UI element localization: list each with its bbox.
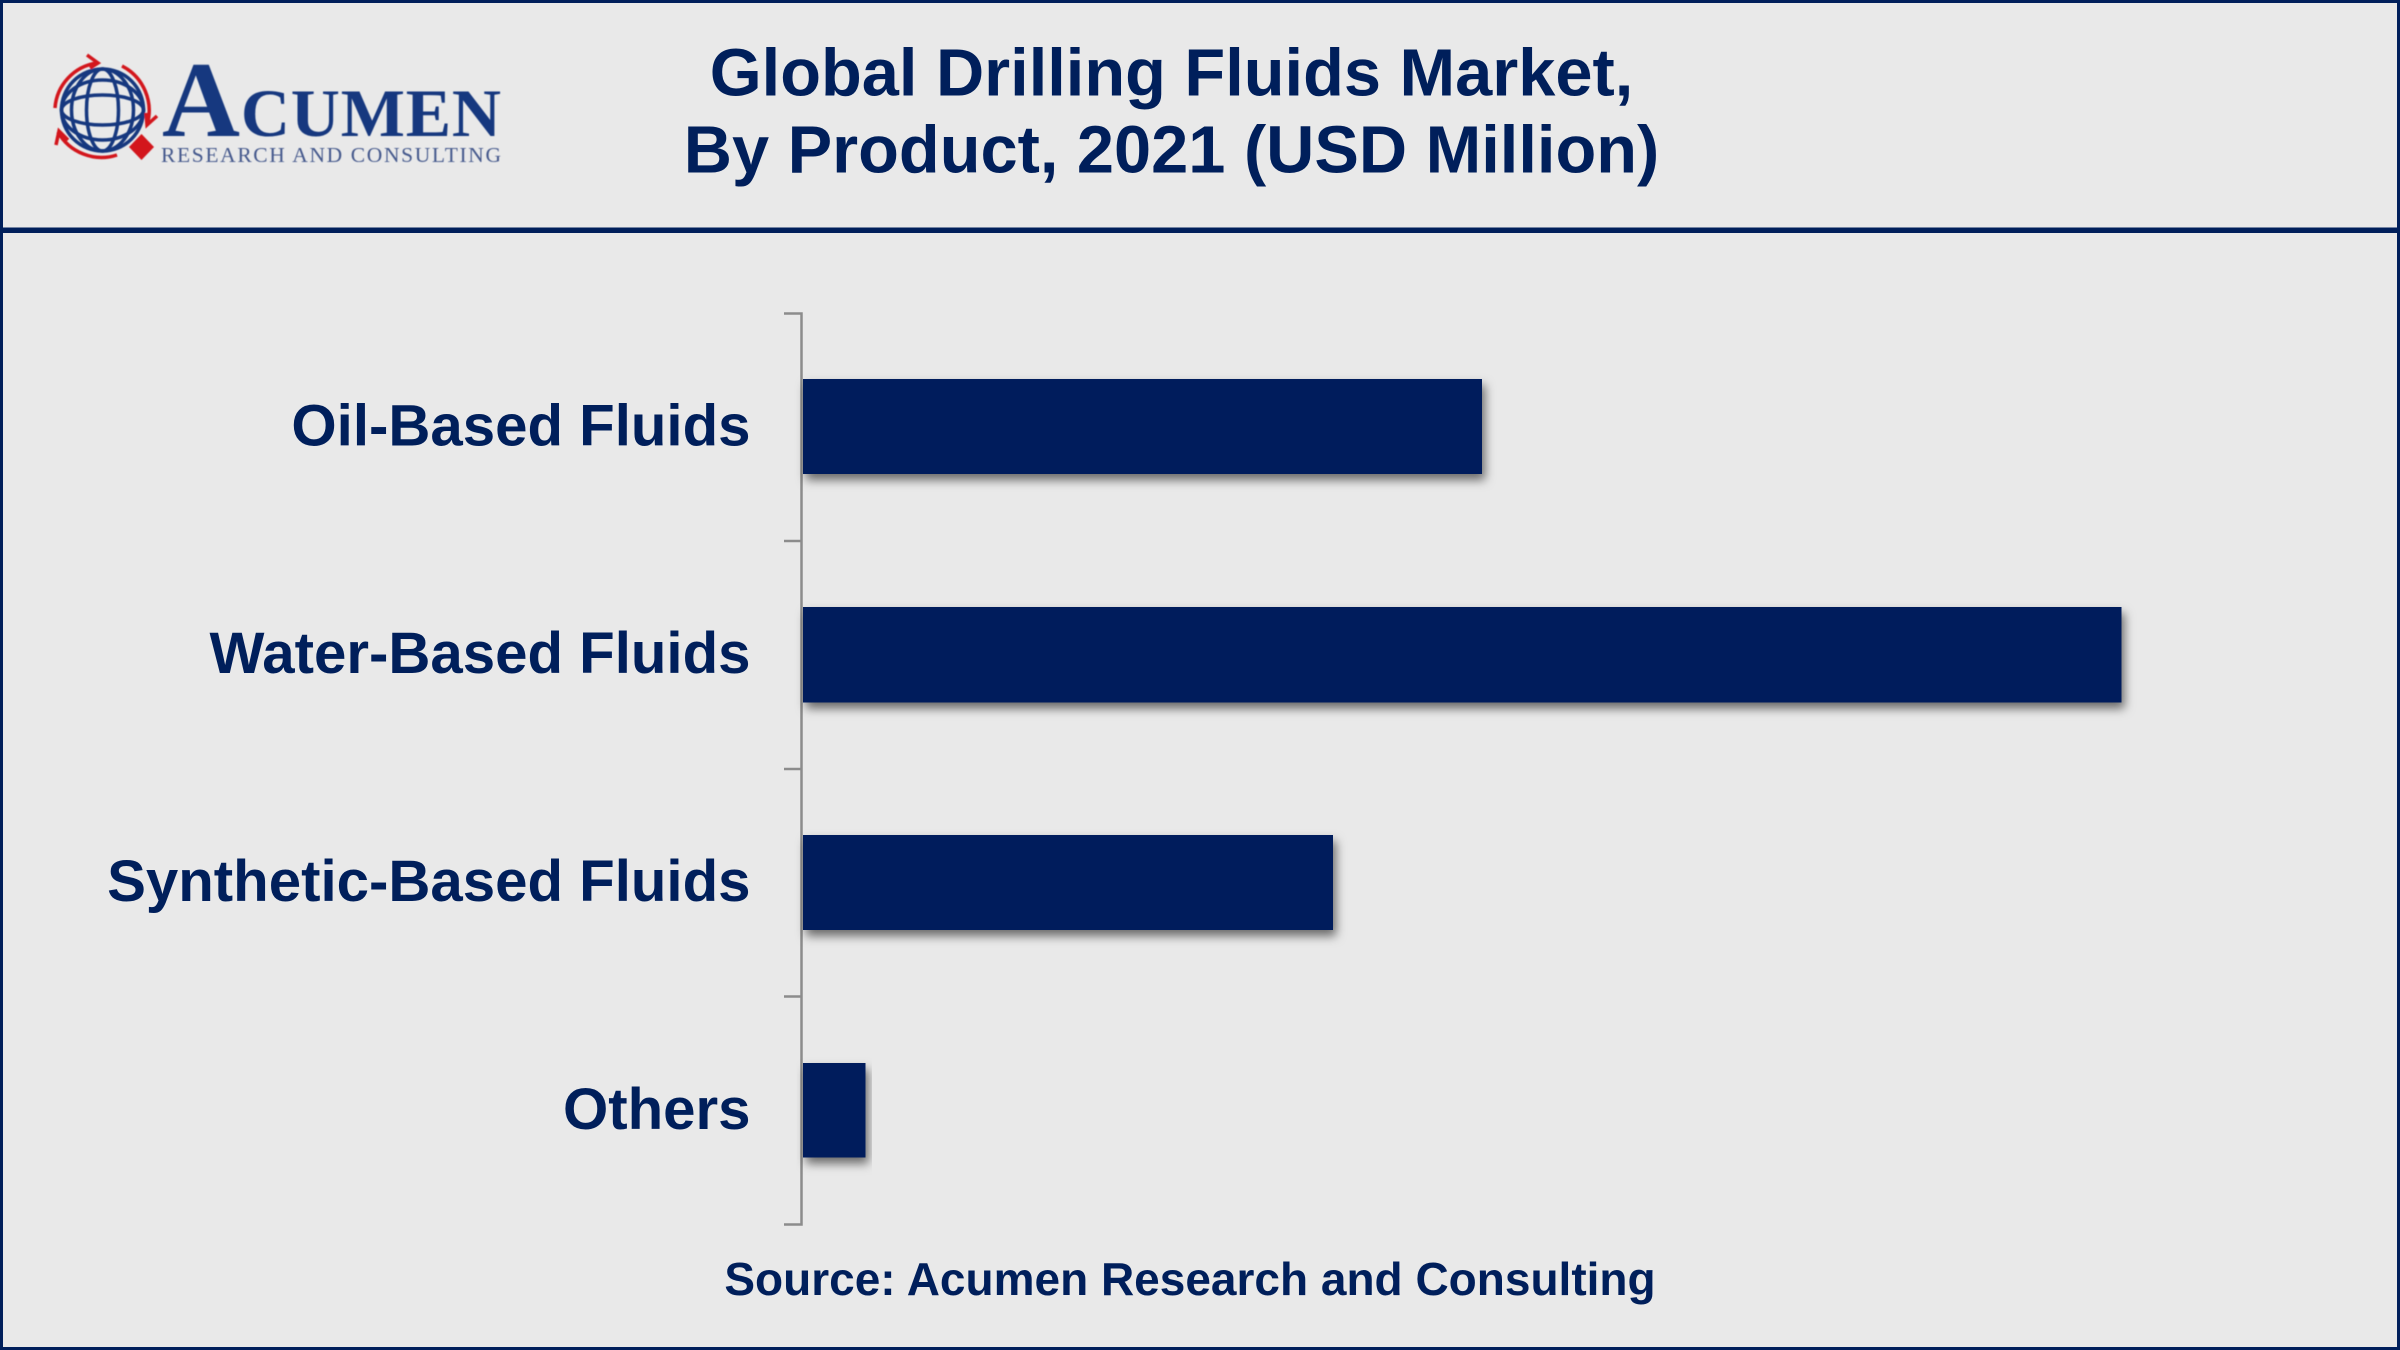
logo tagline: RESEARCH AND CONSULTING [161,143,501,167]
title: By Product, 2021 (USD Million) [684,114,1659,188]
icon: red diamond [129,134,154,160]
label: Others: Others [563,1077,750,1142]
label: Synthetic-Based Fluids: Synthetic-Based Fluids [107,849,750,914]
logo wordmark: ACUMEN [162,41,501,160]
source note: Source: Acumen Research and Consulting [724,1253,1656,1305]
title: Global Drilling Fluids Market, [710,36,1633,110]
logo: Acumen Research and Consulting [55,41,501,167]
bar chart [107,314,2122,1224]
axis with ticks [784,314,802,1224]
header divider [0,228,2400,233]
label: Water-Based Fluids: Water-Based Fluids [209,621,750,686]
bar: Water-Based Fluids [209,607,2122,702]
bar: Oil-Based Fluids [291,379,1482,474]
icon: red arrows [55,55,157,157]
icon: globe [62,69,144,151]
bar: Synthetic-Based Fluids [107,835,1333,930]
label: Oil-Based Fluids: Oil-Based Fluids [291,394,750,458]
bar: Others [563,1063,866,1158]
